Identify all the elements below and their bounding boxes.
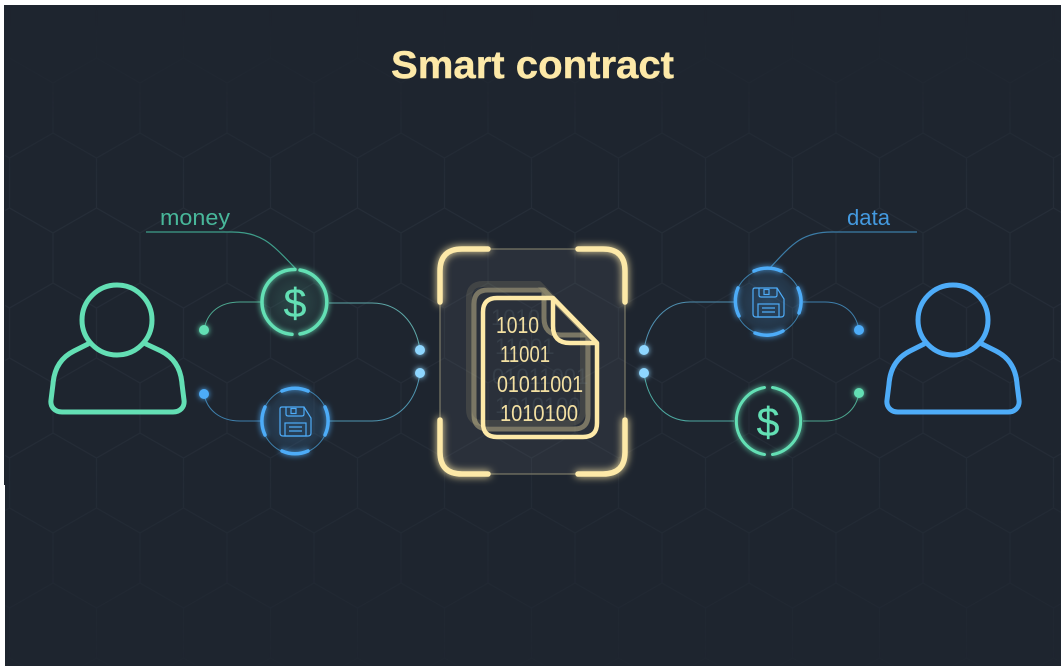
ghost binary text: 01011001: [492, 364, 588, 389]
central contract frame: [440, 249, 625, 474]
binary text: 11001: [500, 341, 550, 367]
title: Smart contract: [391, 44, 674, 87]
coin: dollar right: $: [757, 399, 780, 445]
coin: dollar left: $: [284, 280, 307, 326]
coin: floppy left: [262, 388, 328, 454]
ghost binary text: [491, 305, 588, 418]
icon: floppy disk: [280, 407, 311, 436]
label: money: [146, 205, 296, 269]
hexagon background pattern: [5, 192, 1061, 312]
ghost binary text: 1010100: [495, 393, 581, 418]
left person: money holder: [51, 285, 184, 412]
binary text: 1010: [496, 312, 539, 338]
binary text: 01011001: [497, 371, 583, 397]
coin: dollar left: [262, 269, 328, 335]
coin: dollar right: [736, 388, 801, 454]
binary text: 1010100: [500, 400, 578, 426]
connector lines left: [204, 302, 420, 421]
ghost binary text: 11001: [495, 334, 555, 359]
connector dots: [199, 325, 864, 399]
coin: floppy right: [735, 268, 801, 335]
binary text: [496, 312, 583, 426]
label: money: money: [160, 205, 230, 230]
label: data: data: [847, 205, 891, 230]
connector lines right: [644, 302, 859, 421]
ghost document layers: [469, 284, 588, 429]
icon: floppy disk: [753, 288, 784, 317]
right person: data holder: [887, 285, 1019, 412]
document icon with binary code: [469, 284, 597, 437]
ghost binary text: 1010: [491, 305, 540, 330]
label: data: [769, 205, 917, 269]
